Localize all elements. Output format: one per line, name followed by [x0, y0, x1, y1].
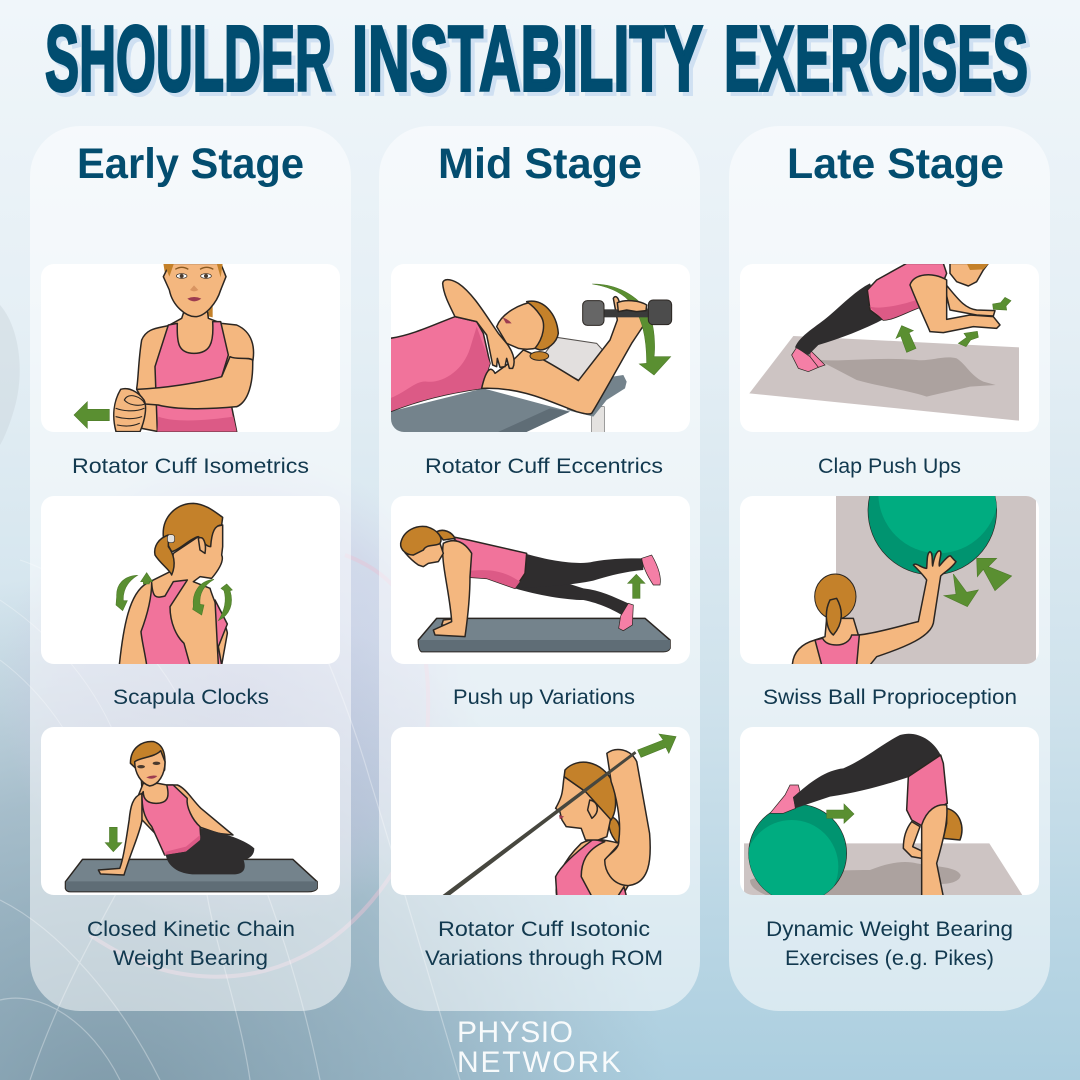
label: scapula clocks: Scapula Clocks: [113, 685, 269, 709]
heading: mid stage: Mid Stage: [438, 140, 642, 188]
title text: SHOULDER: [45, 6, 332, 110]
title shadow: [49, 10, 1032, 114]
card: clap push ups illustration: [740, 263, 1039, 432]
title: [45, 6, 1032, 114]
logo: physio network: PHYSIO: [457, 1016, 573, 1049]
panel: late stage: [729, 126, 1050, 1011]
panel: mid stage: [379, 126, 700, 1011]
title text: INSTABILITY: [352, 6, 703, 110]
label: rotator cuff isotonic variations through rom: Variations through ROM: [425, 946, 663, 970]
label: closed kinetic chain weight bearing: Weight Bearing: [113, 946, 268, 970]
label: clap push ups: Clap Push Ups: [818, 454, 961, 478]
label: closed kinetic chain weight bearing: [87, 917, 295, 970]
label: rotator cuff isometrics: Rotator Cuff Isometrics: [72, 454, 309, 478]
title shadow: INSTABILITY: [356, 10, 707, 114]
title text: [45, 6, 1028, 110]
card: closed kinetic chain illustration: [41, 727, 340, 895]
heading: early stage: Early Stage: [77, 140, 304, 188]
label: rotator cuff isotonic variations through rom: [425, 917, 663, 970]
card: dynamic weight bearing illustration: [740, 727, 1039, 913]
label: push up variations: Push up Variations: [453, 685, 635, 709]
title shadow: SHOULDER: [49, 10, 336, 114]
label: rotator cuff isotonic variations through rom: Rotator Cuff Isotonic: [438, 917, 650, 941]
label: swiss ball proprioception: Swiss Ball Proprioception: [763, 685, 1017, 709]
logo: physio network: NETWORK: [457, 1046, 621, 1079]
card: swiss ball proprioception illustration: [740, 496, 1039, 664]
label: closed kinetic chain weight bearing: Closed Kinetic Chain: [87, 917, 295, 941]
card: rotator cuff eccentrics illustration: [390, 264, 690, 433]
label: rotator cuff eccentrics: Rotator Cuff Eccentrics: [425, 454, 663, 478]
card: rotator cuff isotonic illustration: [391, 727, 690, 897]
panel: early stage: [30, 126, 351, 1011]
label: dynamic weight bearing exercises: Dynamic Weight Bearing: [766, 917, 1013, 941]
heading: late stage: Late Stage: [787, 140, 1004, 188]
label: dynamic weight bearing exercises: [766, 917, 1013, 970]
card: push up variations illustration: [391, 496, 690, 664]
card: rotator cuff isometrics illustration: [41, 263, 340, 432]
card: scapula clocks illustration: [41, 496, 340, 665]
logo: physio network: [457, 1016, 621, 1079]
label: dynamic weight bearing exercises: Exercises (e.g. Pikes): [785, 946, 994, 970]
